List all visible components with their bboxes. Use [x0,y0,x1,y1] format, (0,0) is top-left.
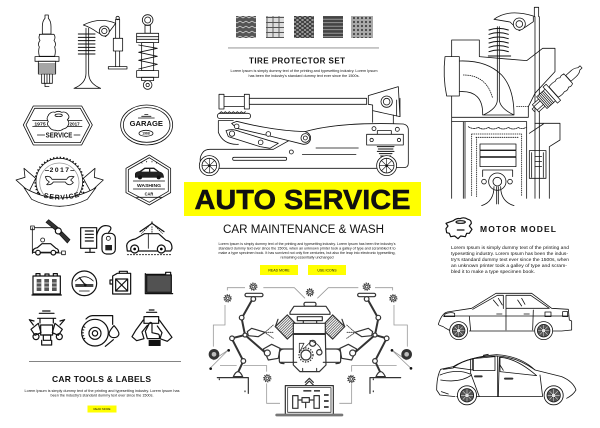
left robot arm [217,293,280,393]
badge: washing car: CAR [145,191,154,197]
badge: washing car [126,155,171,205]
icon: spark plug [35,15,59,87]
subtitle: CAR MAINTENANCE & WASH [223,224,384,236]
icon: motor model engine [446,218,472,239]
text block: main description: Lorem Ipsum is simply dummy text of the printing and typesetting industry. Lorem Ipsum has been the industry's [218,242,396,246]
icon grid: car tools [29,220,173,346]
button: read more small: READ MORE [94,407,111,411]
badge: 1975 2017 service: SERVICE [46,131,72,140]
tire protector patterns [236,16,373,38]
illustration: side view sedan [438,293,572,340]
badge: 2017 service ribbon: • SERVICE • [38,192,84,200]
text block: main description: standard dummy text ever since the 1500s, when an unknown printer took a galley of type and scrambled it to [218,246,396,250]
badge: 2017 service ribbon: 2017 [50,167,69,174]
icon: diagnostic scanner [81,226,115,254]
engine block [275,302,345,372]
text block: motor model description: bled it to make a type specimen book. [451,269,535,274]
badge: 2017 service ribbon [16,156,104,207]
text block: motor model description: typesetting industry. Lorem Ipsum has been the indus- [451,251,568,256]
icon: radiator [145,272,173,294]
text block: tire protector description: Lorem Ipsum is simply dummy text of the printing and typesetting industry. Lorem Ipsum [230,69,378,73]
text block: car tools description: been the industry's standard dummy text ever since the 1500s. [50,394,154,398]
text block: main description: remaining essentially unchanged [280,256,334,260]
icon: robot hand [132,310,172,346]
button: read more: READ MORE [268,268,290,272]
text block: tire protector description [230,69,378,78]
badge: garage 1968: 1968 [142,132,150,136]
button: use icons [308,265,346,275]
text block: car tools description: Lorem Ipsum is simply dummy text of the printing and typesetting industry. Lorem Ipsum has [24,389,180,393]
text block: motor model description: Lorem Ipsum is simply dummy text of the printing and [451,245,569,250]
icon: valve and rocker arm [74,16,127,88]
button: read more [260,265,298,275]
heading: car tools and labels: CAR TOOLS & LABELS [52,374,151,384]
text block: motor model description [451,245,569,274]
icon: battery [32,274,61,295]
icon: fuel canister [110,271,131,294]
text block: motor model description: an unknown printer took a galley of type and scram- [451,263,568,268]
title band: auto service: AUTO SERVICE [194,184,410,215]
button: use icons: USE ICONS [317,268,337,272]
text block: car tools description [24,389,180,398]
right robot arm [340,293,401,393]
icon: up chevrons [305,378,313,385]
illustration: hydraulic floor jack [199,87,408,176]
illustration: perspective sedan [437,354,576,405]
badge: washing car: WASHING [137,183,161,189]
illustration: engine cross-section [444,7,588,206]
icon: brake disc [82,316,119,346]
text block: motor model description: try's standard dummy text ever since the 1500s, when [451,257,569,262]
illustration: robotic engine assembly [209,283,412,416]
icon: engine [29,311,65,345]
icon: car wash [127,222,172,255]
icon: spark plug inset [526,59,588,118]
icon: gauge [72,271,97,296]
text block: main description: make a type specimen book. It has survived not only five centuries, but also the leap into electronic typesetting, [218,251,396,255]
badge: garage 1968: GARAGE [130,121,163,128]
heading: motor model: MOTOR MODEL [480,224,556,234]
laptop with schematic [275,386,343,416]
button: read more small [88,406,116,412]
icon: satellite tracking car [31,220,70,255]
badge: 1975 2017 service: 1975 [34,121,46,127]
text block: main description [218,242,396,260]
icon: shock absorber [137,15,159,89]
badge: 1975 2017 service: 2017 [70,121,80,127]
badge: garage 1968 [121,105,173,145]
badge: 1975 2017 service [23,106,92,145]
heading: tire protector set: TIRE PROTECTOR SET [249,56,345,66]
text block: tire protector description: has been the industry's standard dummy text ever since the 1500s. [248,74,360,78]
